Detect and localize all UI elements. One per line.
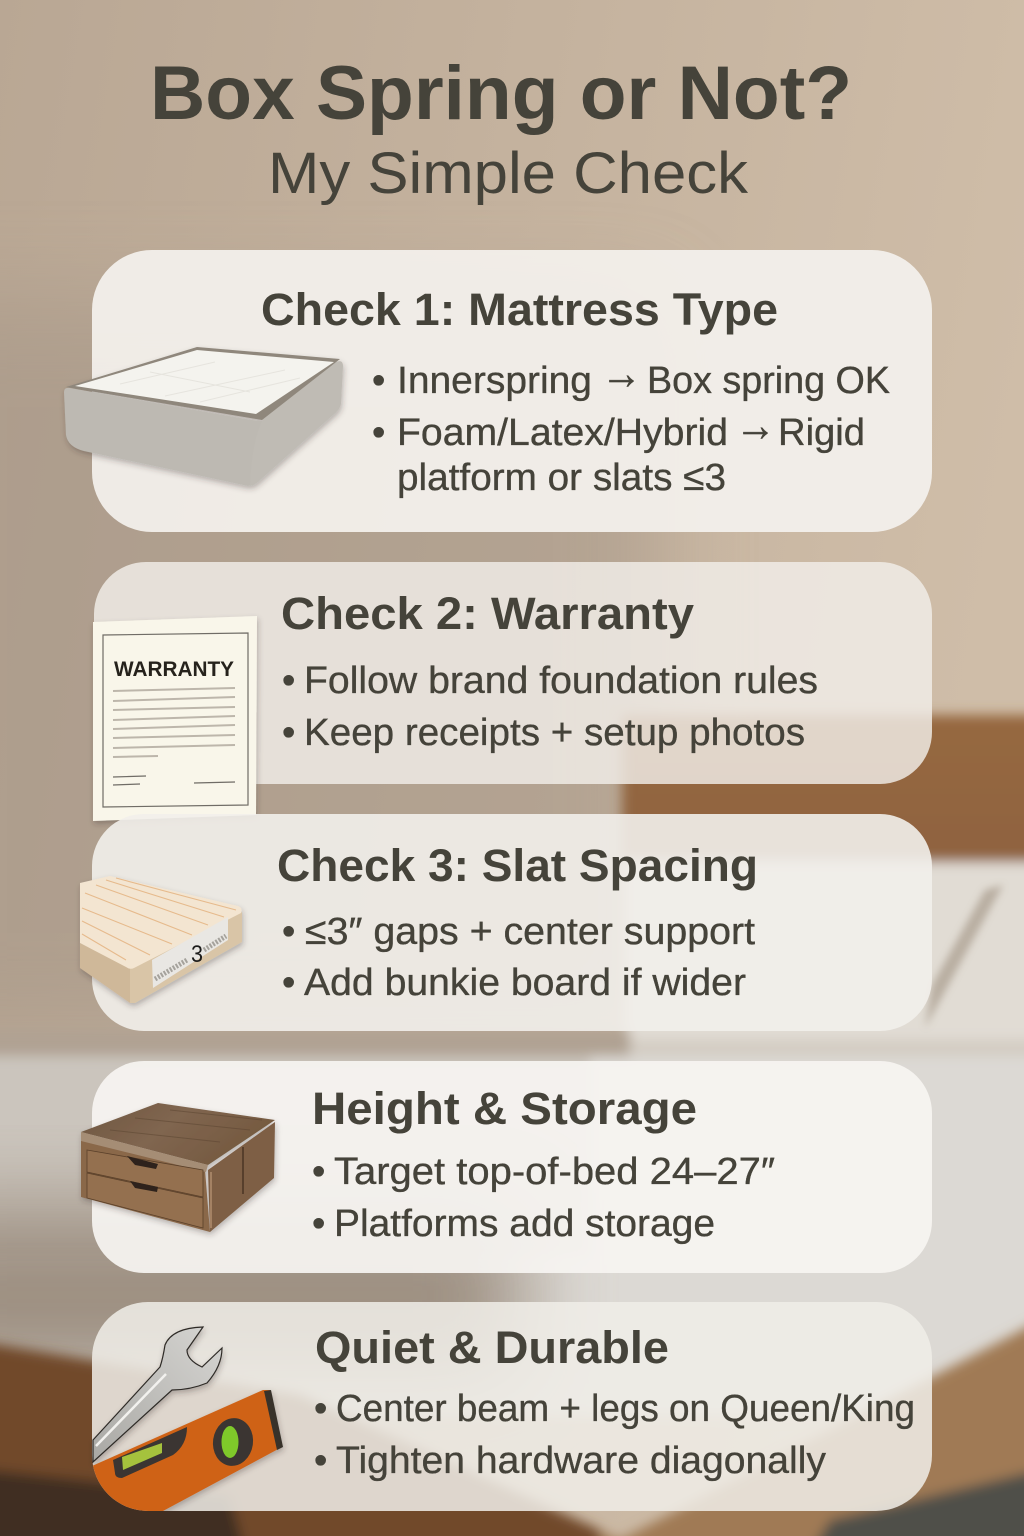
heading: Quiet & Durable [315,1322,669,1373]
bullet list [312,1151,775,1245]
heading: Check 2: Warranty [281,588,694,639]
bullet list: Keep receipts + setup photos [304,712,805,754]
bullet list: • [314,1388,327,1430]
warranty label: WARRANTY [114,658,234,681]
icon: storage platform [81,1103,275,1232]
bullet list [282,911,755,1004]
bullet list: • [312,1203,325,1245]
main heading: Box Spring or Not? [150,51,852,136]
icon: warranty document [93,616,257,821]
bullet list: Platforms add storage [334,1203,715,1245]
bullet list: Innerspring [397,360,592,402]
bullet list: • [282,660,295,702]
bullet list: Add bunkie board if wider [304,962,746,1004]
panel: check 3 slat spacing [80,814,932,1031]
bullet list [372,346,890,499]
bullet list: • [282,712,295,754]
panel: height and storage [81,1061,932,1273]
bullet list: ≤3″ gaps + center support [305,911,755,953]
icon: spirit level [92,1390,283,1511]
subheading: My Simple Check [268,141,749,206]
bullet list: • [282,962,295,1004]
bullet list: Rigid [778,412,865,454]
bullet list: • [372,412,385,454]
bullet list: Foam/Latex/Hybrid [397,412,728,454]
bullet list: platform or slats ≤3 [397,457,726,499]
title [150,51,852,206]
bullet list: Center beam + legs on Queen/King [336,1388,915,1430]
panel: check 2 warranty [94,562,932,784]
heading: Height & Storage [312,1083,697,1134]
panel: check 1 mattress type [64,250,932,532]
icon: slatted base [80,876,242,1003]
panel: quiet and durable [92,1302,932,1511]
icon: wrench [93,1327,222,1462]
heading: Check 3: Slat Spacing [277,840,758,891]
heading: Check 1: Mattress Type [261,284,778,335]
bullet list: Tighten hardware diagonally [336,1440,826,1482]
bullet list: • [314,1440,327,1482]
icon: box spring [64,347,343,486]
bullet list: • [372,360,385,402]
bullet list: Box spring OK [647,360,890,402]
bullet list [314,1388,915,1482]
bullet list: • [312,1151,325,1193]
bullet list: → [601,346,642,399]
bullet list [282,660,818,754]
bullet list: Follow brand foundation rules [304,660,818,702]
label: 3 inch: 3 [191,941,203,968]
bullet list: Target top-of-bed 24–27″ [334,1151,775,1193]
bullet list: • [282,911,295,953]
bullet list: → [735,398,776,451]
